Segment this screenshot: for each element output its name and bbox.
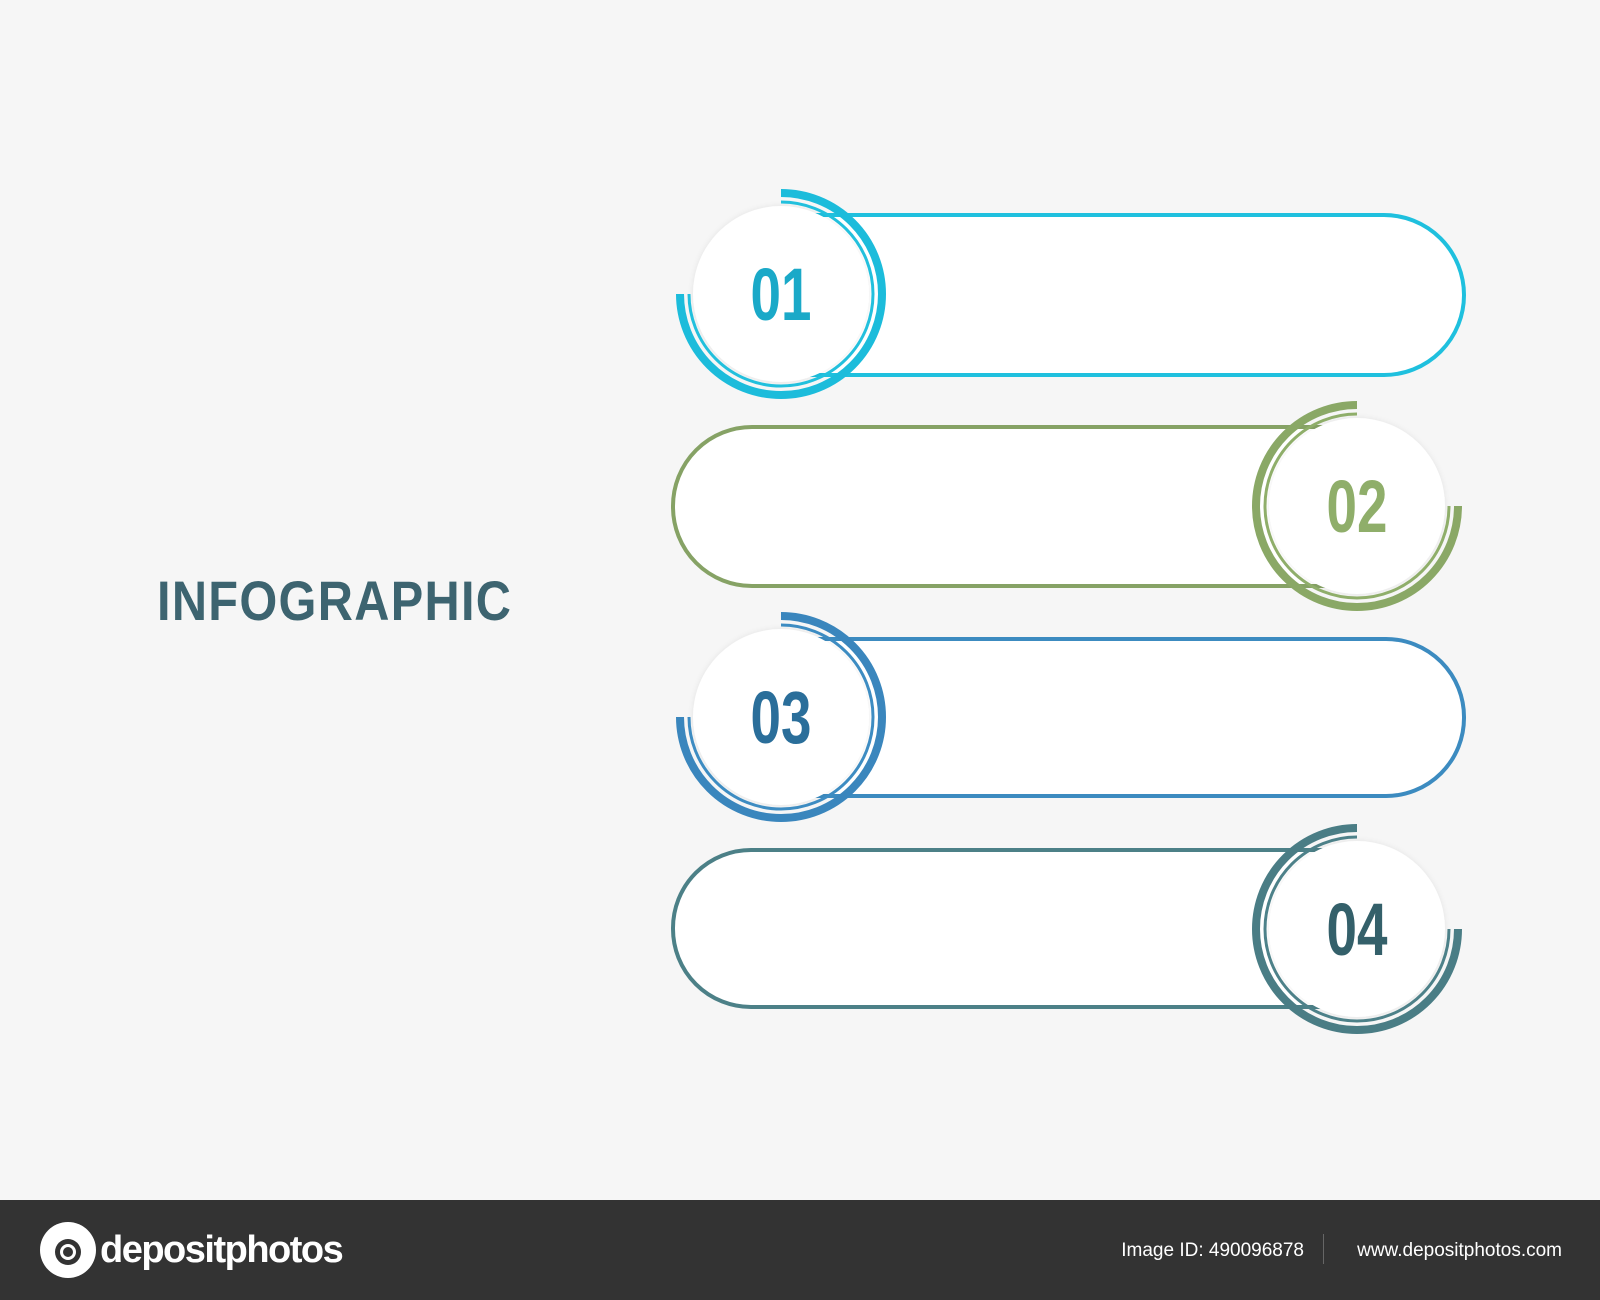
step 01: 01 [751,253,811,336]
step 04 [673,828,1458,1030]
step 04: 04 [1327,888,1387,971]
step 02 [673,405,1458,607]
icon: camera logo [40,1222,96,1278]
logo text: depositphotos [100,1229,343,1271]
step 03 [680,616,1464,818]
step 02: 02 [1327,465,1387,548]
website: www.depositphotos.com [1356,1240,1562,1261]
image id: Image ID: 490096878 [1121,1240,1304,1261]
step 03: 03 [751,676,811,759]
step 01 [680,193,1464,395]
title: INFOGRAPHIC [157,570,512,633]
footer bar [0,1200,1600,1300]
